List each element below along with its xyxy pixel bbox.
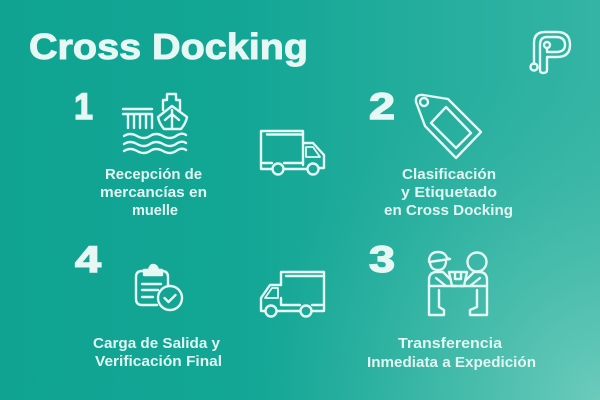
icon: truck left bbox=[261, 272, 324, 316]
number 2: 2 bbox=[369, 86, 395, 127]
label step 3: Inmediata a Expedición bbox=[367, 355, 536, 371]
number 1: 1 bbox=[74, 86, 93, 127]
label step 1: muelle bbox=[132, 203, 178, 219]
label step 2 bbox=[384, 167, 513, 219]
icon: ship at dock bbox=[123, 94, 187, 153]
label step 1: Recepción de bbox=[105, 167, 202, 183]
label step 4: Verificación Final bbox=[95, 354, 222, 370]
label step 2: y Etiquetado bbox=[401, 185, 497, 201]
label step 1 bbox=[100, 167, 207, 219]
title: Cross Docking bbox=[29, 26, 308, 67]
number 4: 4 bbox=[75, 239, 102, 280]
label step 2: Clasificación bbox=[402, 167, 496, 183]
label step 2: en Cross Docking bbox=[384, 203, 513, 219]
label step 4 bbox=[93, 336, 222, 370]
icon: clipboard check bbox=[136, 265, 182, 310]
number 3: 3 bbox=[369, 239, 395, 280]
label step 3: Transferencia bbox=[398, 336, 503, 352]
label step 3 bbox=[367, 336, 536, 371]
icon: two people exchanging a box bbox=[429, 252, 487, 315]
icon: logo P bbox=[530, 32, 570, 73]
icon: price tag bbox=[416, 95, 481, 158]
label step 4: Carga de Salida y bbox=[93, 336, 220, 352]
icon: truck right bbox=[261, 131, 324, 174]
label step 1: mercancías en bbox=[100, 185, 207, 201]
